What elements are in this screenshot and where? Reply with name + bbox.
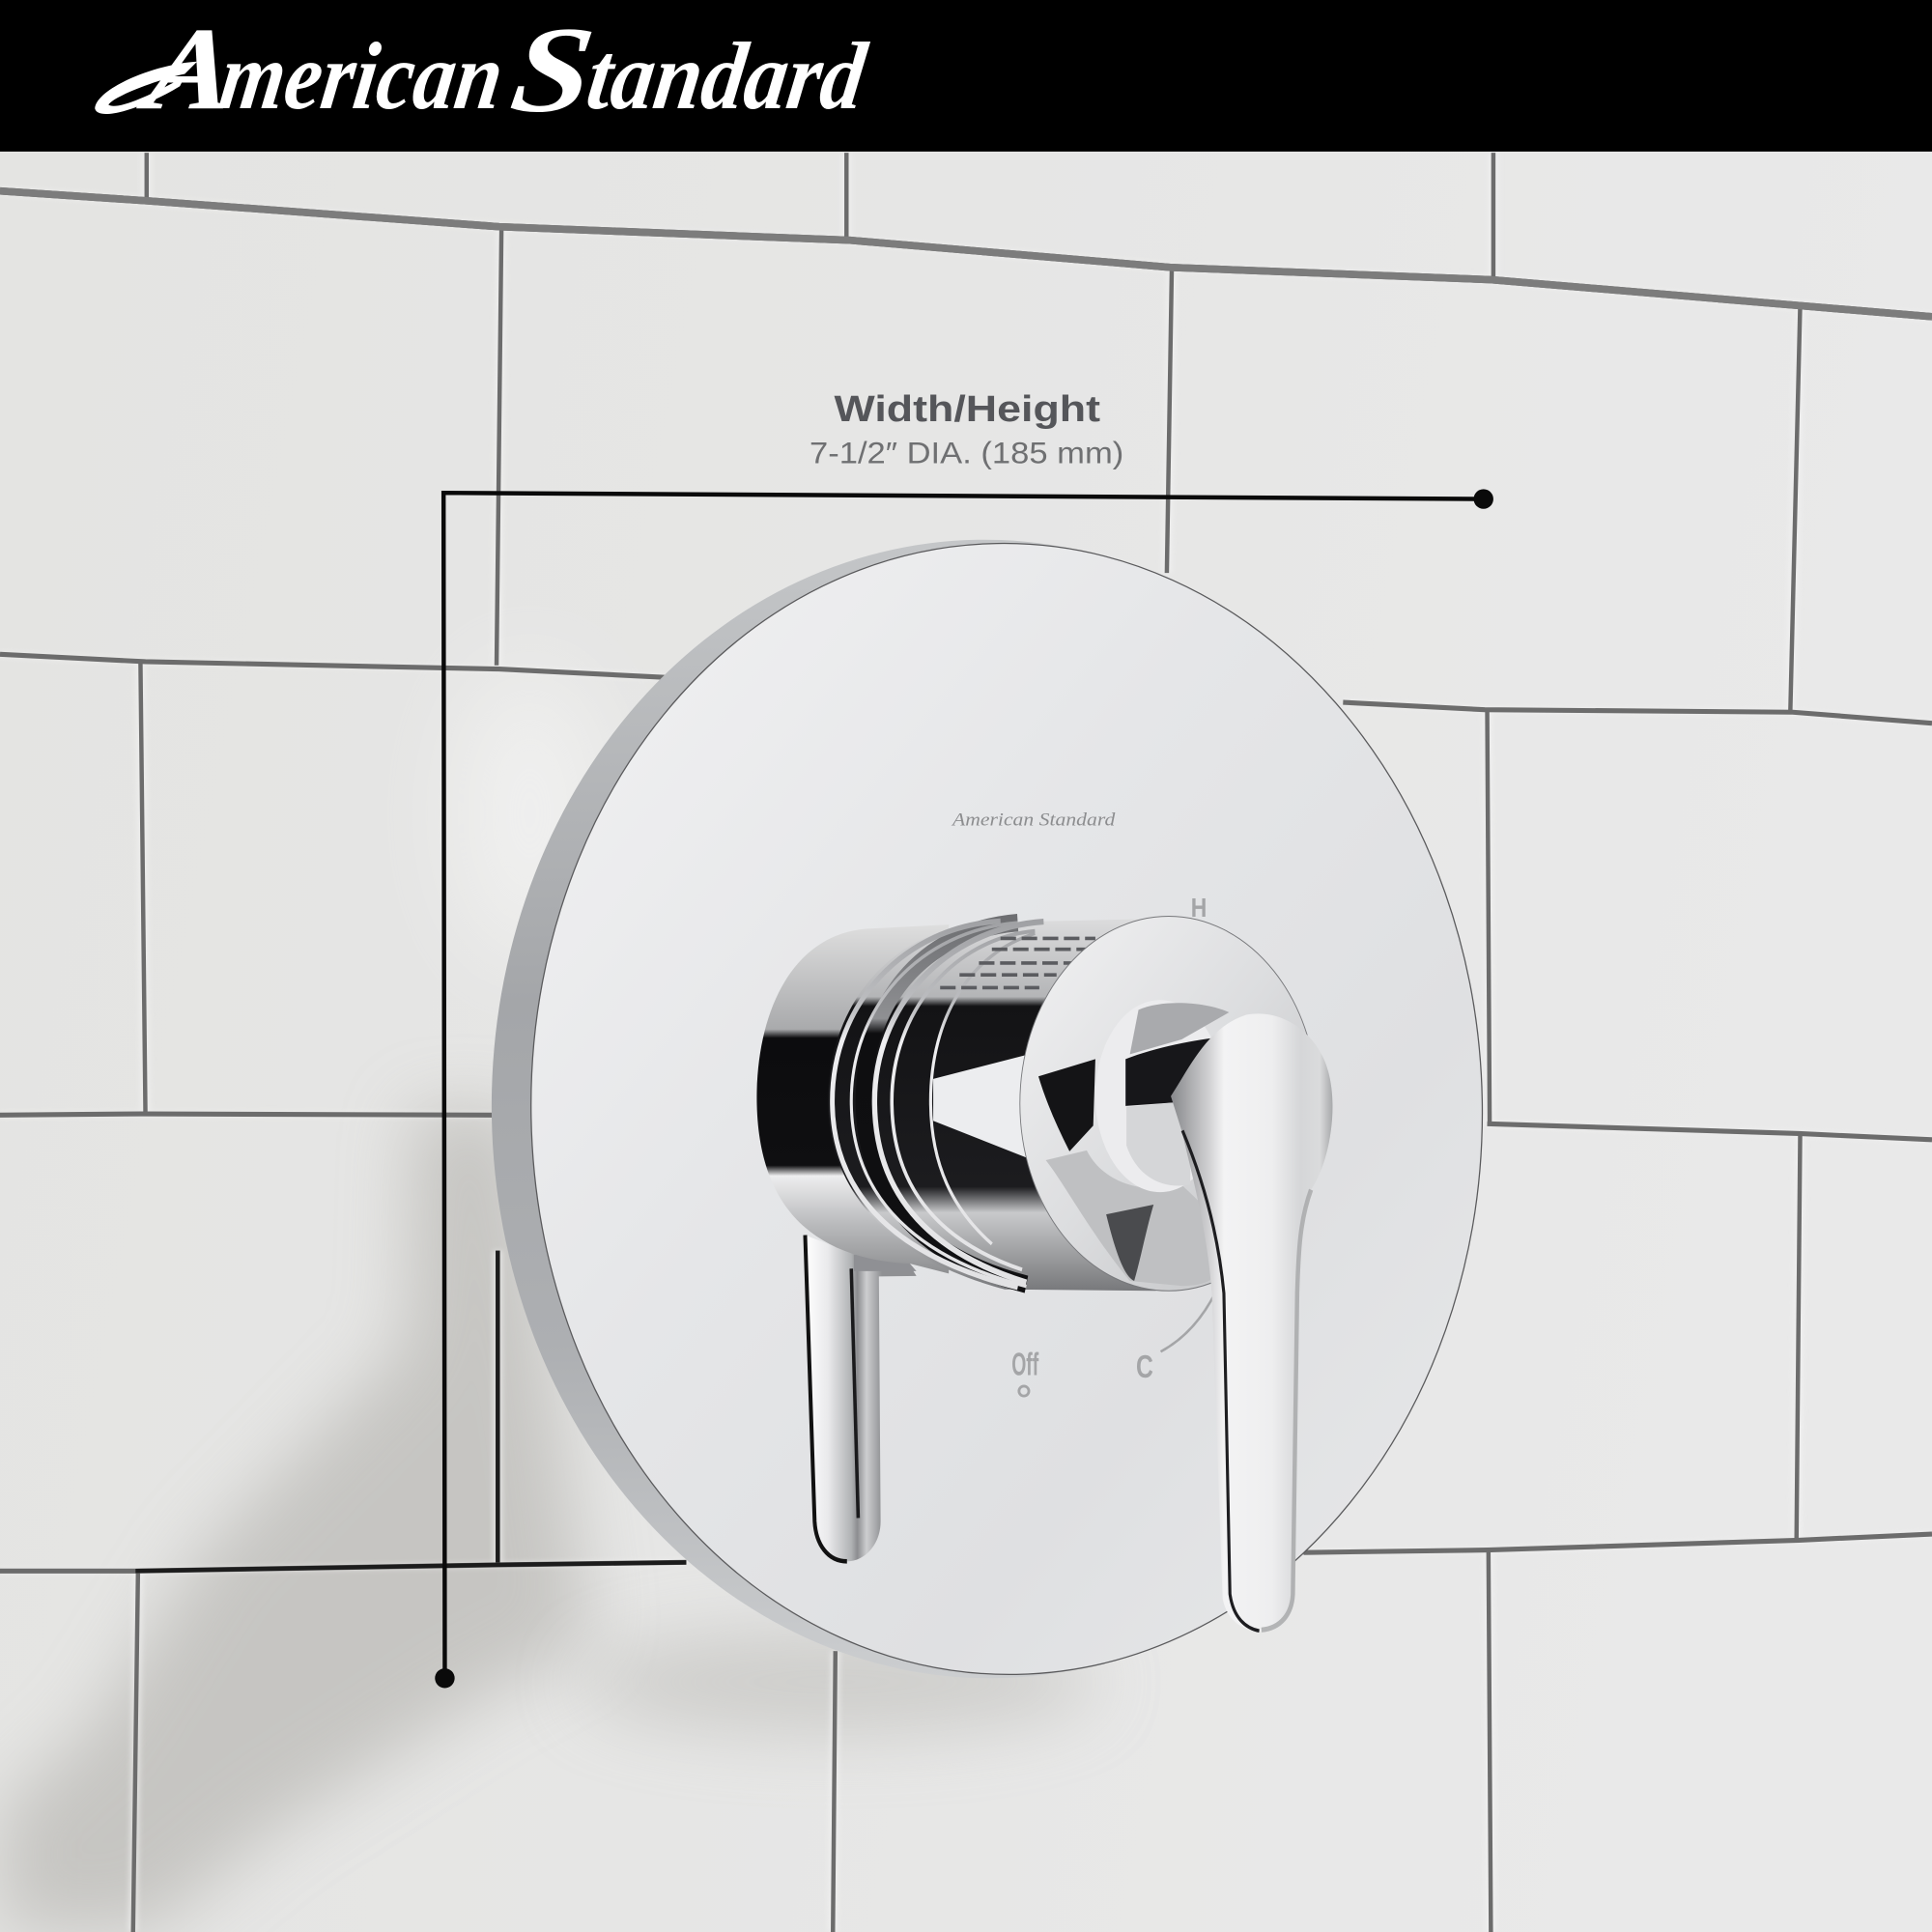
logo word American — [132, 3, 510, 134]
plate front face — [522, 535, 1492, 1683]
valve handle assembly — [756, 916, 1332, 1632]
shower valve trim plate — [482, 531, 1492, 1687]
back cylinder — [756, 924, 949, 1273]
dimension label — [810, 388, 1123, 470]
logo word Standard: S — [504, 1, 602, 138]
hot marking: H — [1191, 893, 1207, 923]
off marking: Off — [1011, 1347, 1039, 1382]
reflection wedge — [933, 1053, 1035, 1160]
groove rings — [833, 922, 1043, 1288]
off dot — [1019, 1386, 1029, 1396]
knurl dashes — [940, 938, 1095, 987]
temperature arc — [1161, 1292, 1216, 1351]
logo word Standard — [504, 1, 874, 138]
disc reflection — [1038, 1059, 1095, 1151]
hub ring — [1095, 1000, 1225, 1192]
logo word Standard: tandard — [582, 23, 874, 129]
hub interior dark — [1125, 1037, 1220, 1106]
lever handle — [1171, 1013, 1332, 1632]
lever reflection in plate — [805, 1236, 917, 1561]
hub interior light — [1126, 1101, 1190, 1185]
hub interior top — [1130, 1003, 1229, 1054]
dimension title: Width/Height — [835, 388, 1100, 430]
hub reflection — [1106, 1205, 1153, 1281]
bracket end dot right — [1474, 489, 1493, 509]
header bar — [0, 0, 1932, 152]
knurled collar — [828, 919, 1155, 1291]
dimension bracket — [435, 489, 1493, 1688]
dimension value: 7-1/2″ DIA. (185 mm) — [810, 436, 1123, 470]
bracket end dot bottom — [435, 1668, 455, 1688]
logo swash — [95, 62, 197, 114]
front disc — [1020, 916, 1318, 1291]
engraved plate logo: American Standard — [951, 810, 1116, 831]
logo word American: A — [132, 3, 244, 134]
logo word American: merican — [213, 23, 510, 129]
cold marking: C — [1136, 1350, 1153, 1385]
